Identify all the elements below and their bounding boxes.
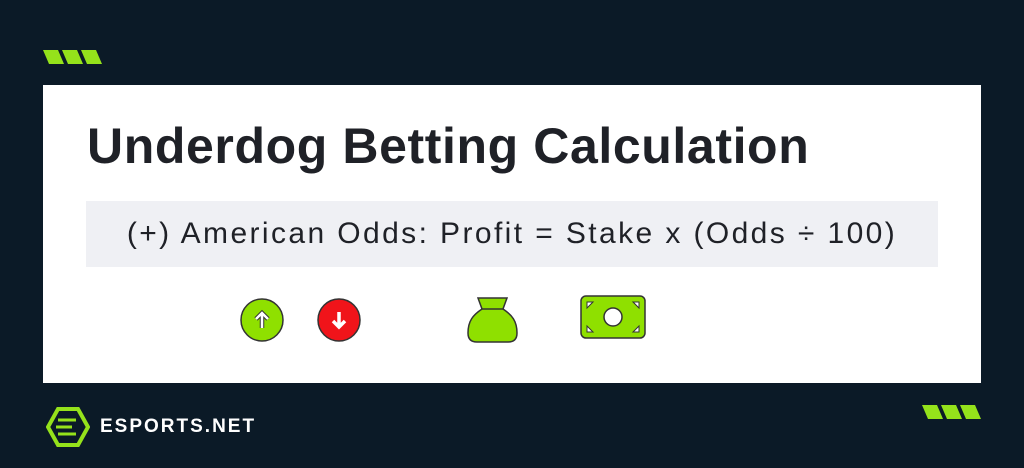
panel: main card <box>43 85 981 383</box>
logo text: ESPORTS.NET <box>100 416 256 437</box>
icon: up arrow circle <box>241 299 283 341</box>
icon: banknote <box>581 296 645 338</box>
decor stripes top-left <box>43 50 102 64</box>
icons row <box>240 295 646 343</box>
decor stripes bottom-right <box>922 405 981 419</box>
formula bar <box>86 201 938 267</box>
formula bar: (+) American Odds: Profit = Stake x (Odds ÷ 100) <box>127 217 897 250</box>
icon: money bag <box>468 298 517 342</box>
title: Underdog Betting Calculation <box>87 118 809 174</box>
logo <box>46 407 256 447</box>
icon: logo hexagon <box>46 407 90 447</box>
icon: down arrow circle <box>318 299 360 341</box>
